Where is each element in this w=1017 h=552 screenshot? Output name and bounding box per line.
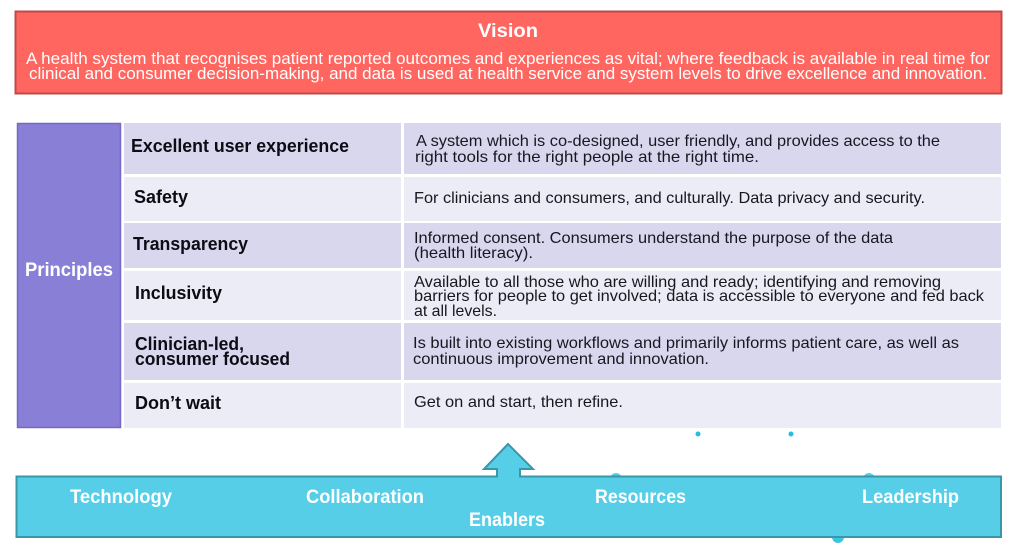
label: clinician-led, consumer focused: Clinician-led, (135, 334, 244, 354)
label: excellent user experience: Excellent user experience (131, 136, 349, 156)
table row: inclusivity (124, 271, 1001, 320)
label: transparency: Transparency (133, 234, 248, 254)
label: safety: Safety (134, 187, 188, 207)
table row: don't wait (124, 383, 1001, 428)
heading: principles: Principles (25, 260, 113, 281)
panel: vision (16, 12, 1002, 94)
text: vision statement: A health system that recognises patient reported outcomes and experiences as vital; where feedback is available in real time for (26, 49, 990, 68)
description: excellent user experience (415, 133, 940, 166)
description: inclusivity (414, 274, 985, 320)
heading: enablers: Enablers (469, 510, 545, 531)
label: clinician-led, consumer focused (135, 334, 290, 369)
label: technology: Technology (70, 487, 172, 508)
label: resources: Resources (595, 487, 686, 508)
description: inclusivity: barriers for people to get involved; data is accessible to everyone and fed back (414, 288, 985, 305)
description: transparency (414, 230, 893, 262)
label: inclusivity: Inclusivity (135, 283, 222, 303)
label: leadership: Leadership (862, 487, 959, 508)
table row: clinician-led, consumer focused (124, 323, 1001, 380)
panel: principles (18, 124, 120, 428)
description: clinician-led, consumer focused (413, 335, 959, 368)
text: vision statement: clinical and consumer decision-making, and data is used at health service and system levels to drive excellence and innovation. (29, 64, 987, 83)
description: transparency: (health literacy). (414, 245, 533, 262)
text: vision statement (26, 49, 990, 83)
description: excellent user experience: right tools for the right people at the right time. (415, 149, 759, 166)
description: clinician-led, consumer focused: continuous improvement and innovation. (413, 351, 709, 368)
heading: vision: Vision (478, 21, 538, 42)
description: don't wait: Get on and start, then refine. (414, 394, 623, 411)
table row: safety (124, 177, 1001, 221)
description: safety: For clinicians and consumers, and culturally. Data privacy and security. (414, 190, 925, 207)
decorative dot (788, 432, 794, 436)
description: clinician-led, consumer focused: Is built into existing workflows and primarily informs patient care, as well as (413, 335, 959, 352)
panel: enablers bar with arrow (16, 444, 1001, 543)
description: inclusivity: at all levels. (414, 303, 497, 320)
description: inclusivity: Available to all those who are willing and ready; identifying and removing (414, 274, 941, 291)
label: collaboration: Collaboration (306, 487, 424, 508)
decorative dot (696, 432, 700, 436)
description: transparency: Informed consent. Consumers understand the purpose of the data (414, 230, 893, 247)
table row: excellent user experience (124, 123, 1001, 174)
label: clinician-led, consumer focused: consumer focused (135, 349, 290, 369)
table row: transparency (124, 223, 1001, 268)
label: don't wait: Don’t wait (135, 393, 221, 413)
description: excellent user experience: A system which is co-designed, user friendly, and provides access to the (416, 133, 940, 150)
